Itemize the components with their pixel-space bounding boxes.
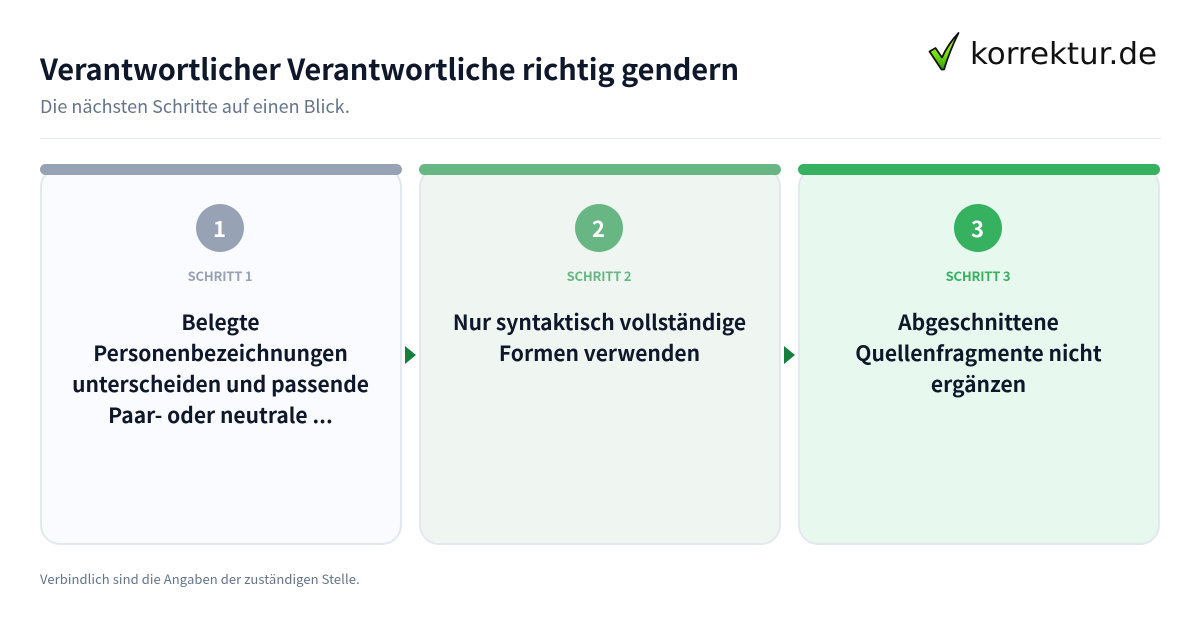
title: Verantwortlicher Verantwortliche richtig gendern bbox=[40, 47, 739, 89]
divider bbox=[40, 138, 1161, 139]
icon: green check mark bbox=[930, 33, 958, 70]
panel: step 3 bbox=[798, 164, 1160, 545]
arrow 2 bbox=[784, 346, 795, 364]
panel: step 2 bbox=[419, 164, 781, 545]
panel: step 2: 2 bbox=[592, 212, 605, 244]
panel: step 1: 1 bbox=[213, 212, 226, 244]
subtitle: Die nächsten Schritte auf einen Blick. bbox=[40, 93, 350, 119]
panel: step 3: SCHRITT 3 bbox=[946, 266, 1010, 285]
panel: step 1: SCHRITT 1 bbox=[188, 266, 252, 285]
footer note: Verbindlich sind die Angaben der zuständigen Stelle. bbox=[40, 569, 360, 588]
panel: step 1: Belegte Personenbezeichnungen unterscheiden und passende Paar- oder neutrale ... bbox=[72, 307, 369, 430]
panel: step 1 bbox=[40, 164, 402, 545]
panel: step 2: Nur syntaktisch vollständige Formen verwenden bbox=[453, 307, 746, 368]
arrow 1 bbox=[405, 346, 416, 364]
logo wordmark: korrektur.de bbox=[970, 37, 1157, 72]
panel: step 3: Abgeschnittene Quellenfragmente nicht ergänzen bbox=[855, 307, 1102, 399]
panel: step 2: SCHRITT 2 bbox=[567, 266, 631, 285]
panel: step 3: 3 bbox=[971, 212, 984, 244]
logo: korrektur.de bbox=[928, 32, 1157, 72]
